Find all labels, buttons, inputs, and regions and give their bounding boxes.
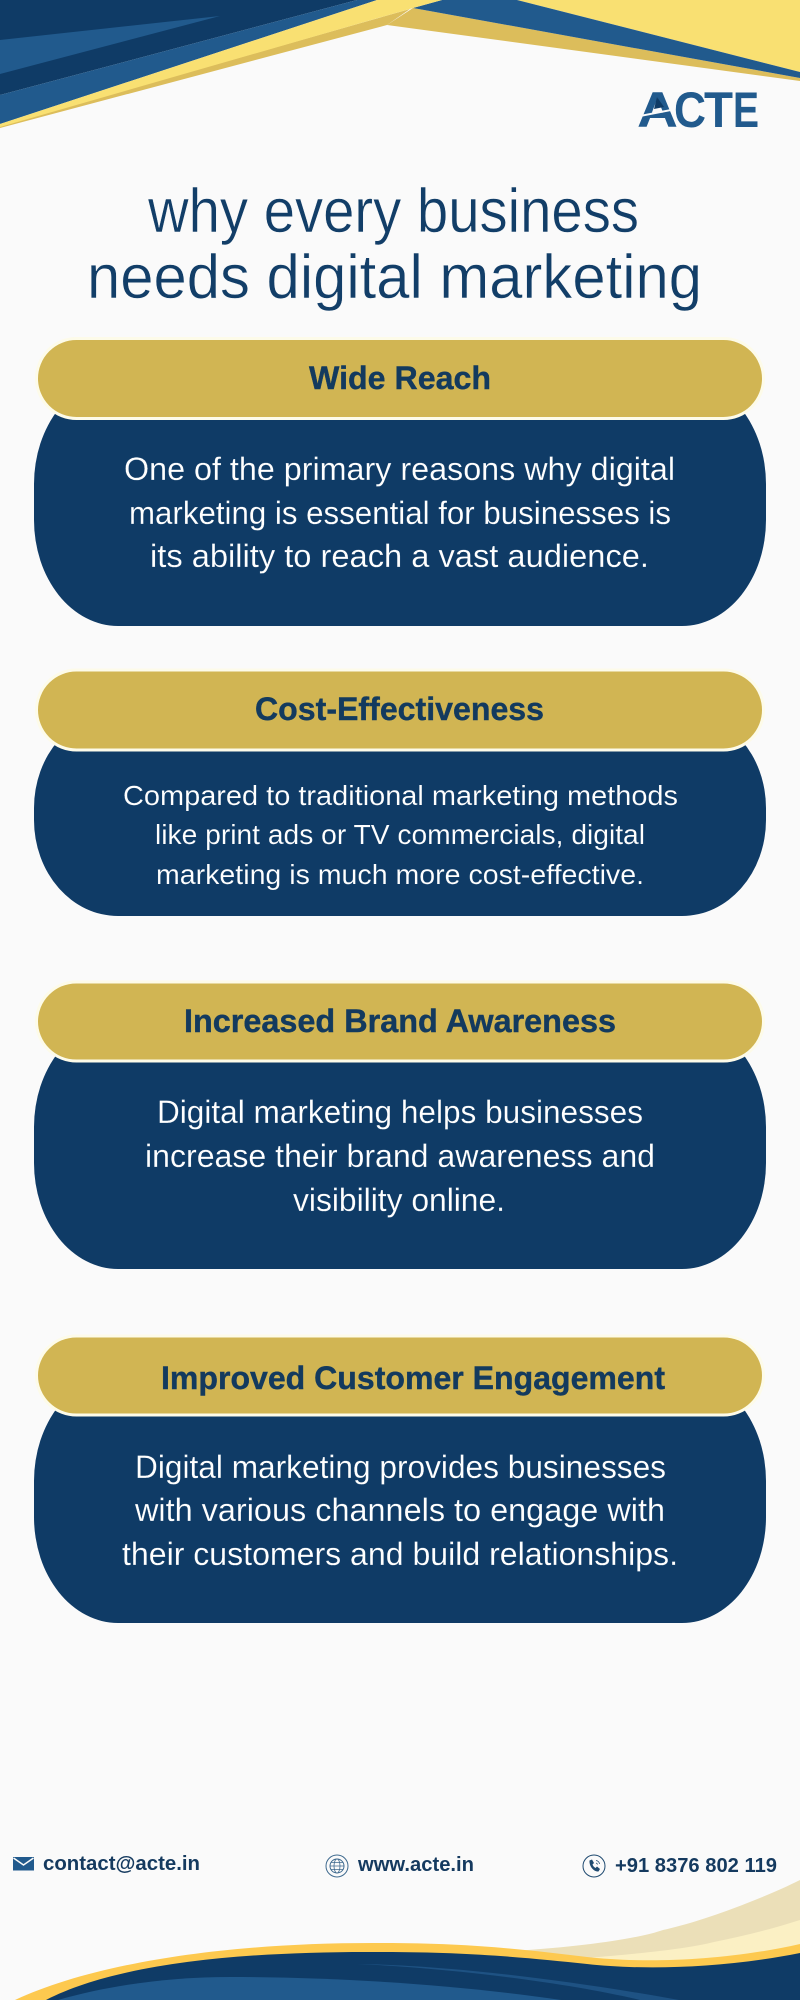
logo: ACTE: A [637, 82, 678, 138]
logo: ACTE: E [733, 82, 759, 138]
website address: www.acte.in [357, 1854, 474, 1876]
title [87, 177, 702, 312]
phone number: +91 8376 802 119 [615, 1855, 777, 1877]
panel: Wide Reach [34, 338, 766, 626]
body text [122, 1449, 678, 1572]
logo: ACTE [637, 82, 759, 138]
body text: Compared to traditional marketing methods [123, 780, 678, 811]
card body [34, 1021, 766, 1269]
body text: like print ads or TV commercials, digital [155, 819, 645, 850]
email address: contact@acte.in [43, 1853, 200, 1875]
body text: One of the primary reasons why digital [124, 451, 675, 487]
heading pill [36, 670, 764, 750]
body text: Digital marketing helps businesses [157, 1094, 643, 1130]
heading: Increased Brand Awareness [184, 1003, 616, 1039]
body text: Digital marketing provides businesses [135, 1449, 666, 1485]
title: needs digital marketing [87, 243, 702, 312]
body text: marketing is essential for businesses is [129, 495, 671, 531]
body text [123, 780, 678, 890]
logo: ACTE: C [674, 82, 706, 138]
body text [145, 1094, 655, 1218]
contact: website [326, 1854, 474, 1877]
contact: phone [583, 1855, 777, 1877]
icon: phone [583, 1855, 605, 1877]
heading: Improved Customer Engagement [161, 1360, 665, 1396]
heading pill [36, 338, 764, 418]
heading pill [36, 1336, 764, 1415]
card body [34, 1375, 766, 1623]
body text: their customers and build relationships. [122, 1536, 678, 1572]
panel: Improved Customer Engagement [34, 1336, 766, 1623]
body text: increase their brand awareness and [145, 1138, 655, 1174]
contact: email [13, 1853, 200, 1875]
body text: marketing is much more cost-effective. [156, 859, 644, 890]
logo: ACTE: T [704, 82, 733, 138]
body text [124, 451, 675, 574]
panel: Increased Brand Awareness [34, 982, 766, 1269]
heading: Wide Reach [309, 360, 491, 396]
heading: Cost-Effectiveness [255, 691, 544, 727]
body text: with various channels to engage with [134, 1492, 665, 1528]
title: why every business [147, 177, 639, 246]
heading pill [36, 982, 764, 1061]
body text: its ability to reach a vast audience. [150, 538, 649, 574]
icon: envelope [13, 1857, 34, 1870]
card body [34, 378, 766, 626]
panel: Cost-Effectiveness [34, 670, 766, 916]
bottom wave footer [15, 1880, 800, 2000]
body text: visibility online. [293, 1182, 505, 1218]
icon: globe [326, 1855, 348, 1877]
top corner banner [0, 0, 800, 128]
card body [34, 712, 766, 916]
